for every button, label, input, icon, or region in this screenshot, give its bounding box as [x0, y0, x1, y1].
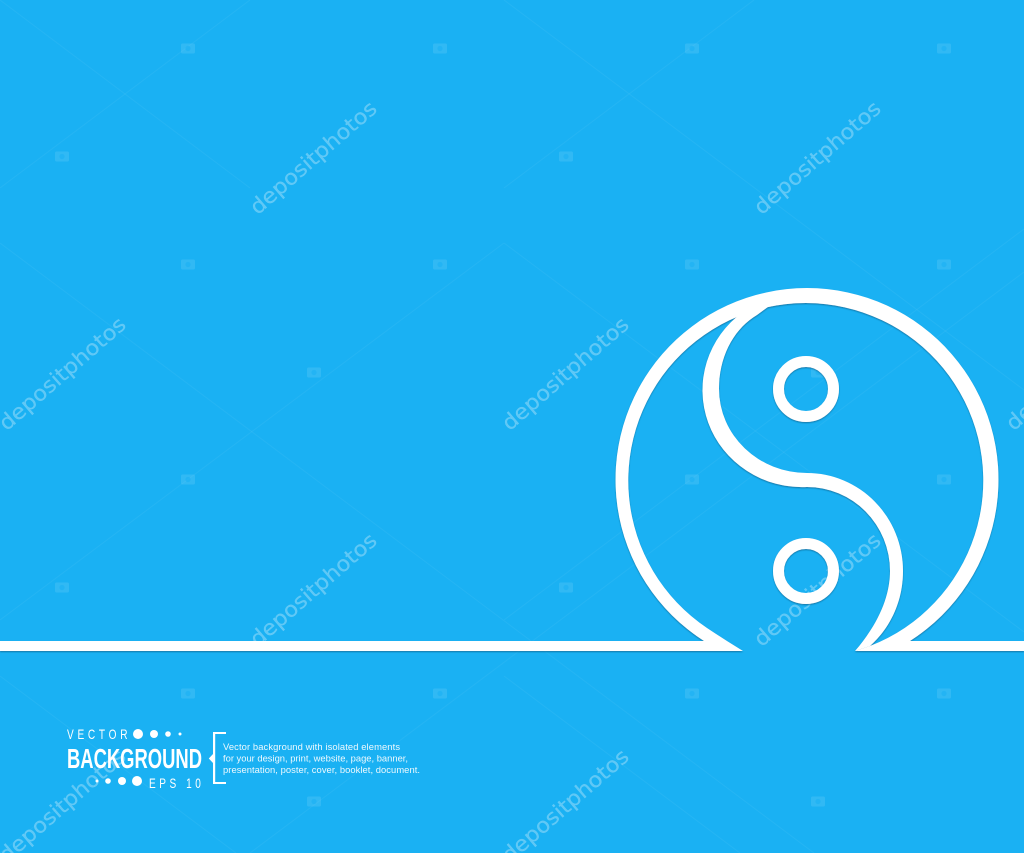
bracket with pointer [209, 732, 226, 784]
bottom dots [96, 776, 142, 786]
ring with horizontal baseline [0, 288, 1024, 651]
description text: Vector background with isolated elements [223, 741, 400, 752]
icon: yin yang line drawing with baseline [0, 288, 1024, 651]
watermark: depositphotos repeated: depositphotos [245, 528, 382, 651]
watermark: depositphotos repeated: depositphotos [497, 312, 634, 435]
watermark: small camera icons [55, 44, 951, 806]
caption block: vector background logo and description [67, 726, 420, 791]
label: BACKGROUND: BACKGROUND [67, 743, 202, 774]
upper dot ring [778, 362, 834, 416]
description text [223, 741, 420, 775]
watermark: depositphotos repeated: depositphotos [749, 528, 886, 651]
watermark: depositphotos repeated: depositphotos [245, 96, 382, 219]
description text: presentation, poster, cover, booklet, document. [223, 764, 420, 775]
lower dot ring [778, 544, 834, 598]
label: EPS 10: EPS 10 [149, 775, 201, 791]
top dots [133, 729, 182, 739]
S curve [702, 304, 903, 651]
description text: for your design, print, website, page, banner, [223, 752, 408, 764]
label: VECTOR: VECTOR [67, 726, 128, 742]
watermark: depositphotos repeated: depositphotos [749, 96, 886, 219]
